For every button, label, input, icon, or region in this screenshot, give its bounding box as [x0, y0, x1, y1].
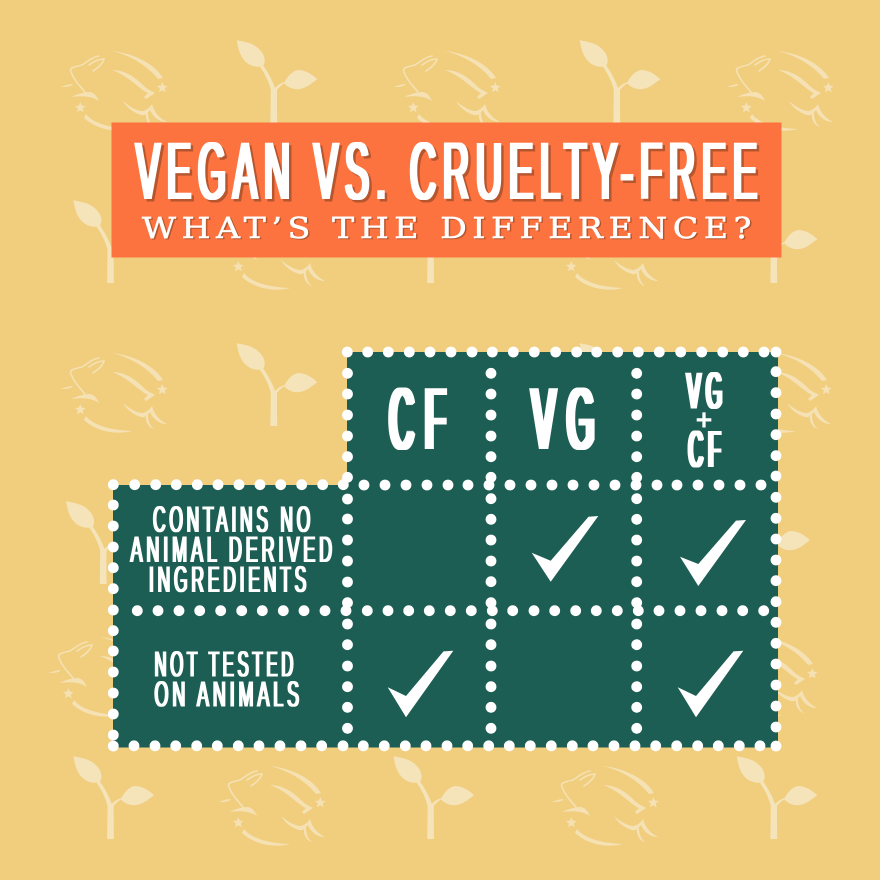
banner background [112, 122, 782, 258]
comparison table: ANIMAL DERIVED [130, 529, 336, 570]
check: CF, not tested on animals [388, 651, 453, 717]
comparison table: ON ANIMALS [154, 674, 303, 714]
comparison table: VG [532, 369, 606, 468]
comparison table: NOT TESTED [154, 644, 297, 684]
column header: VG + CF [687, 362, 728, 479]
row label: contains no animal derived ingredients: INGREDIENTS [149, 559, 310, 600]
row label: contains no animal derived ingredients [130, 499, 336, 600]
subtitle: WHAT’S THE DIFFERENCE? [144, 212, 758, 246]
subtitle: WHAT’S THE DIFFERENCE? [142, 211, 757, 245]
dotted grid lines [108, 347, 781, 751]
check: VG+CF, not tested on animals [678, 651, 743, 717]
comparison table: CF [688, 421, 726, 479]
table background [113, 352, 778, 748]
title banner [112, 122, 782, 258]
comparison table [108, 347, 781, 751]
check: VG, no animal ingredients [532, 516, 598, 582]
row label: contains no animal derived ingredients: CONTAINS NO [153, 499, 314, 540]
comparison table: VG [687, 362, 728, 420]
comparison table: CF [390, 369, 457, 468]
column header: VG + CF: + [696, 404, 712, 437]
row label: not tested on animals [154, 644, 303, 714]
check: VG+CF, no animal ingredients [680, 520, 746, 586]
